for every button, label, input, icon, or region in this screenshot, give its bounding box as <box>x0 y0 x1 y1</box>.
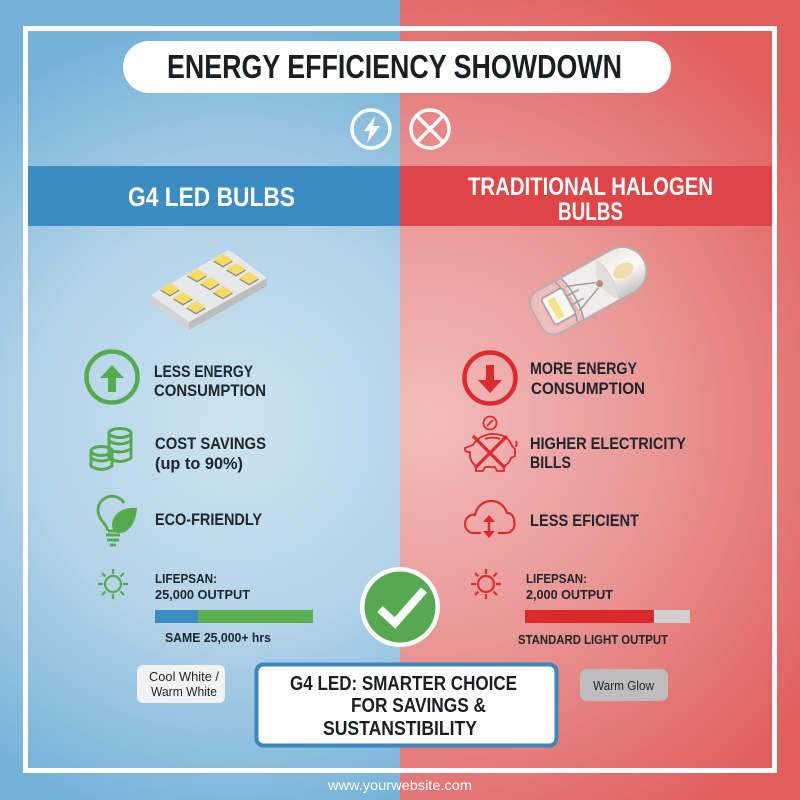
icon: LED chip board <box>151 251 267 330</box>
tag: warm glow <box>580 669 668 701</box>
callout: conclusion: G4 LED: SMARTER CHOICE <box>290 672 517 695</box>
text: LED lifespan: 25,000 OUTPUT <box>155 587 250 602</box>
callout: conclusion <box>256 664 556 746</box>
text: less energy consumption <box>154 363 266 400</box>
text: less efficient: LESS EFICIENT <box>530 512 639 530</box>
text: LED lifespan: LIFEPSAN: <box>155 571 217 586</box>
icon: red sun <box>471 569 501 599</box>
text: halogen lifespan: LIFEPSAN: <box>526 571 587 586</box>
tag: cool white / warm white: Warm White <box>151 685 217 699</box>
text: halogen lifespan: 2,000 OUTPUT <box>526 587 613 602</box>
icon: check badge <box>360 567 440 647</box>
icon: coin stacks <box>91 428 131 470</box>
icon: cloud with arrows <box>465 501 514 538</box>
text: same hours: SAME 25,000+ hrs <box>165 630 271 645</box>
text: cost savings <box>155 435 266 473</box>
icon: green up arrow <box>86 352 138 402</box>
text: higher electricity bills: HIGHER ELECTRICITY <box>530 435 686 453</box>
tag: cool white / warm white: Cool White / <box>149 670 220 684</box>
icon: lightning bolt <box>352 110 390 148</box>
icon: crossed circle <box>411 110 449 148</box>
text: LED lifespan <box>155 571 250 602</box>
text: eco-friendly: ECO-FRIENDLY <box>155 511 262 529</box>
text: halogen lifespan <box>526 571 613 602</box>
panel heading: traditional halogen bulbs <box>400 166 772 226</box>
text: more energy consumption: CONSUMPTION <box>531 380 645 398</box>
text: less energy consumption: CONSUMPTION <box>154 382 266 400</box>
title: ENERGY EFFICIENCY SHOWDOWN <box>167 48 622 85</box>
footer url: www.yourwebsite.com <box>327 777 472 793</box>
title <box>123 41 671 93</box>
text: less energy consumption: LESS ENERGY <box>154 363 253 381</box>
text: cost savings: COST SAVINGS <box>155 435 266 453</box>
callout: conclusion: FOR SAVINGS & <box>351 694 486 717</box>
icon: red down arrow <box>464 352 516 404</box>
text: more energy consumption <box>530 360 645 398</box>
text: standard light output: STANDARD LIGHT OUTPUT <box>518 632 668 647</box>
tag: cool white / warm white <box>137 665 225 703</box>
icon: halogen bulb <box>525 238 655 340</box>
icon: eco bulb with leaf <box>98 496 137 545</box>
tag: warm glow: Warm Glow <box>593 679 655 693</box>
text: higher electricity bills <box>530 435 686 472</box>
bar: LED lifespan <box>155 610 313 623</box>
panel heading: traditional halogen bulbs: BULBS <box>558 198 623 226</box>
panel heading: G4 LED bulbs: G4 LED BULBS <box>128 182 295 212</box>
background: LED side <box>0 0 400 800</box>
bar: halogen lifespan <box>525 610 690 623</box>
background: halogen side <box>400 0 800 800</box>
text: more energy consumption: MORE ENERGY <box>530 360 637 378</box>
panel heading: G4 LED bulbs <box>28 166 400 226</box>
text: cost savings: (up to 90%) <box>155 455 243 473</box>
text: higher electricity bills: BILLS <box>530 454 571 472</box>
icon: crossed piggy bank <box>465 416 517 471</box>
icon: green sun <box>98 569 128 599</box>
panel heading: traditional halogen bulbs: TRADITIONAL HALOGEN <box>468 173 713 201</box>
callout: conclusion: SUSTANSTIBILITY <box>323 717 477 740</box>
